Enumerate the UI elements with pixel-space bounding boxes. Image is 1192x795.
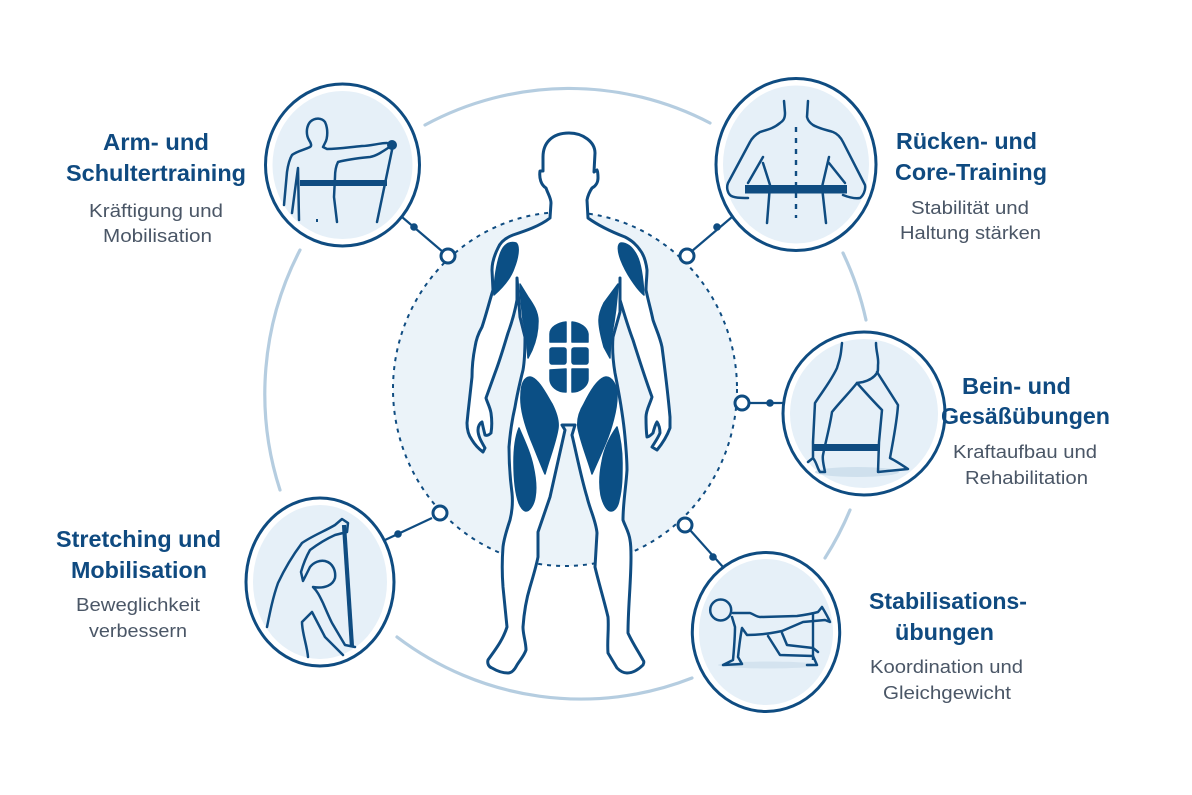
connector: stretching	[385, 506, 447, 540]
icon: arm and shoulder training	[266, 84, 420, 246]
icon: stretching exercise	[246, 498, 394, 666]
icon: back and core training	[716, 78, 876, 250]
label: leg and glute exercises	[941, 373, 1110, 488]
connector: arm and shoulder	[402, 217, 455, 263]
label: back and core training: Rücken- und	[896, 128, 1037, 154]
icon: stabilisation exercise	[692, 552, 840, 712]
label: back and core training	[895, 128, 1047, 243]
muscle: left quadriceps	[521, 377, 558, 474]
label: back and core training: Core-Training	[895, 159, 1047, 185]
muscle: right deltoid	[618, 243, 644, 295]
label: stretching and mobilisation: Stretching und	[56, 526, 221, 552]
label: stretching and mobilisation: verbessern	[89, 621, 187, 641]
connector: stabilisation	[678, 518, 723, 567]
connector: back and core	[680, 217, 732, 263]
label: stabilisation exercises: Gleichgewicht	[883, 683, 1011, 703]
label: arm and shoulder training: Arm- und	[103, 129, 209, 155]
icon: leg and glute exercise	[783, 332, 945, 495]
muscle: right oblique	[599, 284, 618, 358]
muscle: left deltoid	[494, 242, 518, 295]
label: arm and shoulder training: Mobilisation	[103, 226, 212, 246]
outer ring segments	[265, 88, 866, 699]
label: stabilisation exercises	[869, 588, 1027, 703]
muscle: right outer thigh	[600, 427, 622, 511]
muscle: right quadriceps	[578, 377, 617, 474]
label: stretching and mobilisation	[56, 526, 221, 641]
label: leg and glute exercises: Kraftaufbau und	[953, 442, 1097, 462]
muscle: abdominals	[550, 322, 588, 392]
central dashed circle	[393, 212, 737, 566]
label: leg and glute exercises: Gesäßübungen	[941, 403, 1110, 429]
body outline	[467, 133, 670, 673]
label: stabilisation exercises: übungen	[895, 619, 994, 645]
muscle: left oblique	[520, 284, 538, 358]
label: stabilisation exercises: Koordination und	[870, 657, 1023, 677]
label: back and core training: Haltung stärken	[900, 223, 1041, 243]
human body figure	[467, 133, 670, 673]
label: stabilisation exercises: Stabilisations-	[869, 588, 1027, 614]
label: stretching and mobilisation: Mobilisation	[71, 557, 207, 583]
label: arm and shoulder training: Schultertraining	[66, 160, 246, 186]
label: leg and glute exercises: Rehabilitation	[965, 468, 1088, 488]
label: arm and shoulder training: Kräftigung und	[89, 201, 223, 221]
muscle: left outer thigh	[514, 428, 536, 511]
label: arm and shoulder training	[66, 129, 246, 246]
label: stretching and mobilisation: Beweglichkeit	[76, 595, 200, 615]
connector: legs	[735, 396, 783, 410]
label: back and core training: Stabilität und	[911, 198, 1029, 218]
label: leg and glute exercises: Bein- und	[962, 373, 1071, 399]
